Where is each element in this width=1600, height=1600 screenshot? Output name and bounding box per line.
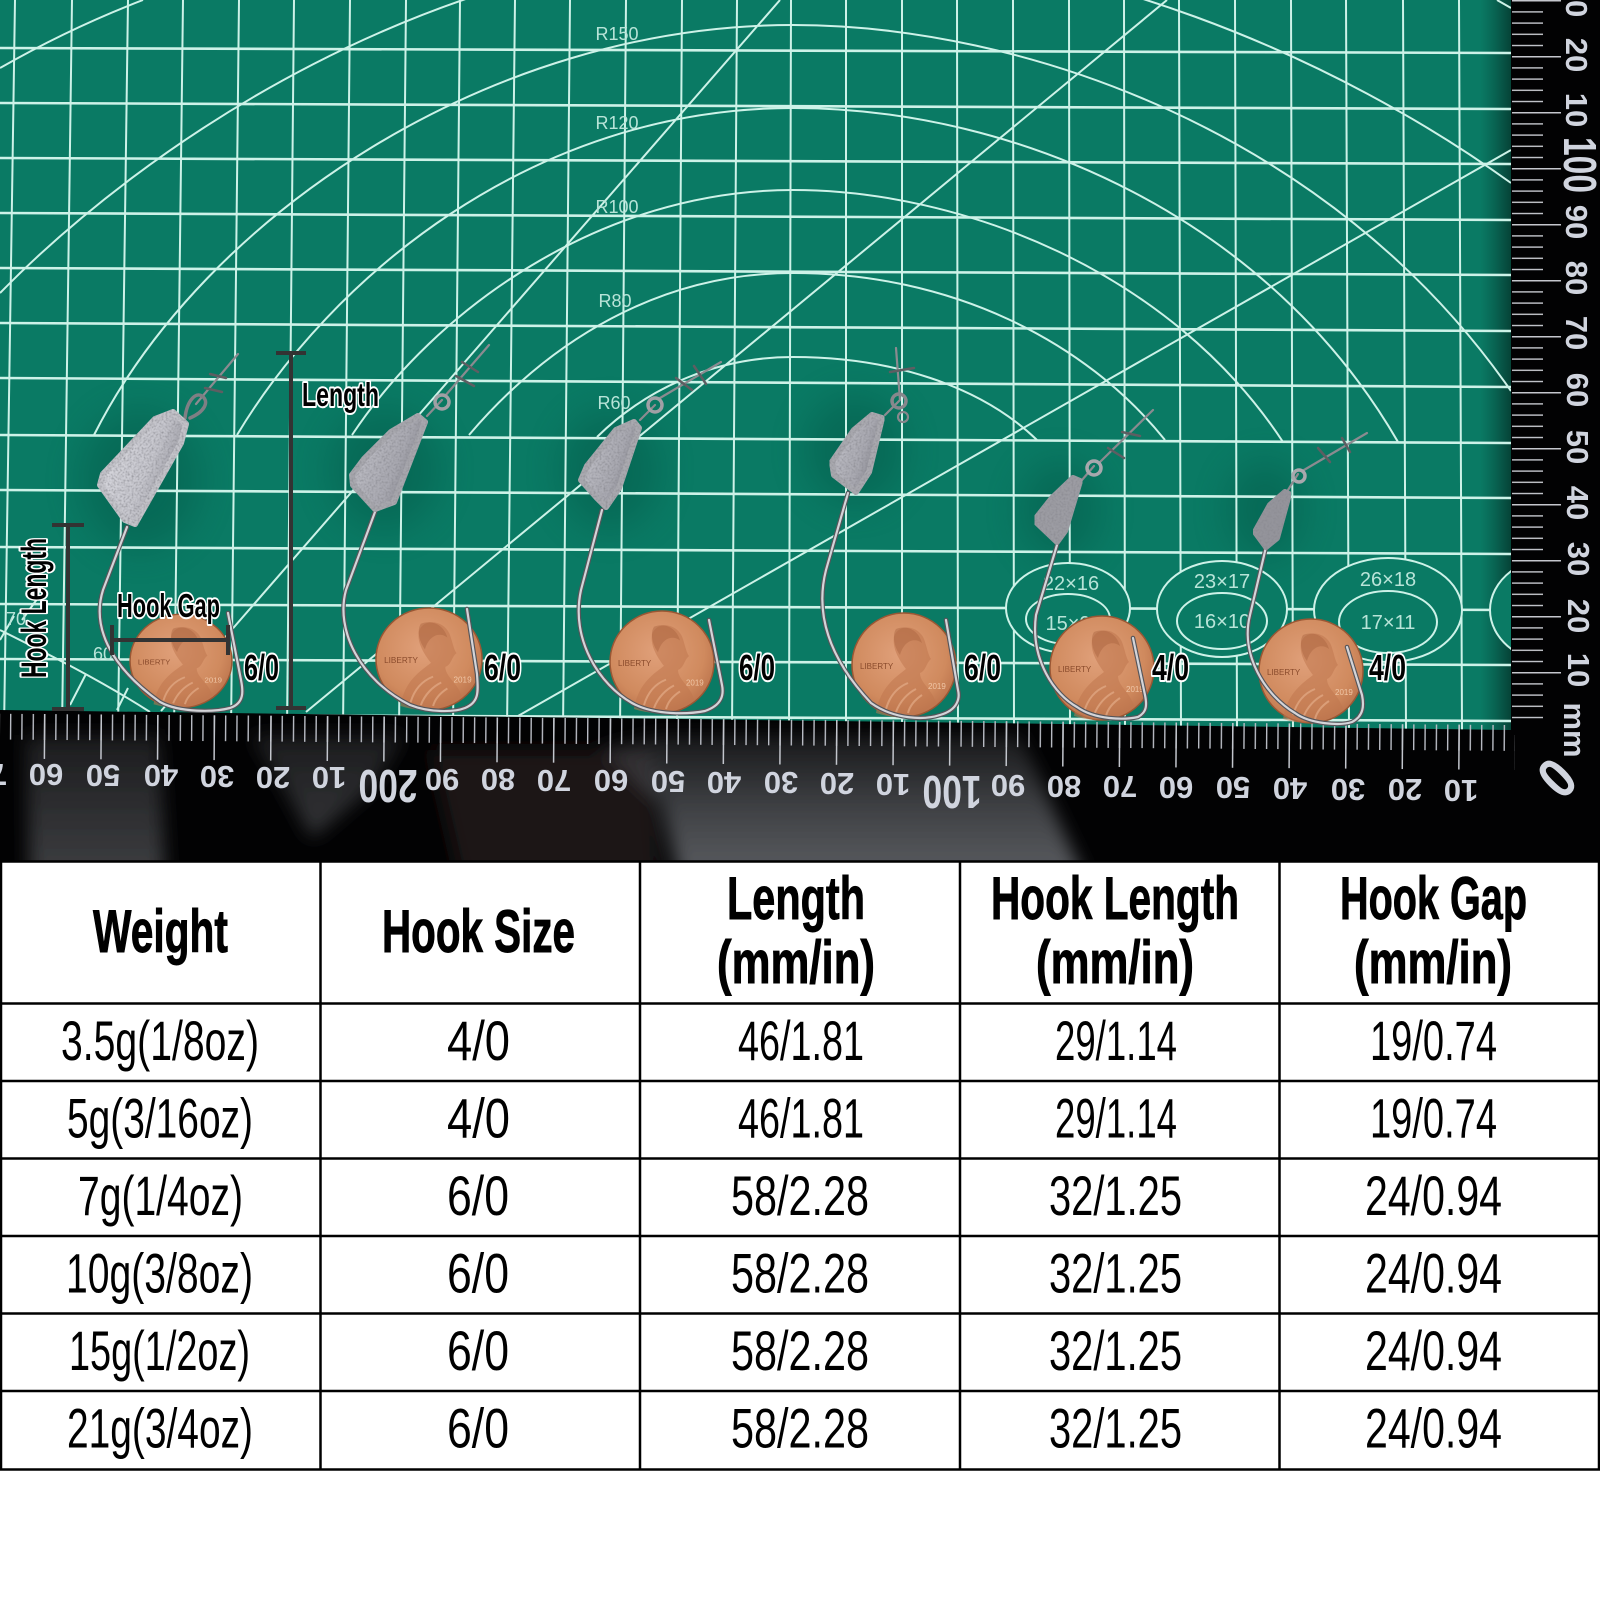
table header: Hook Length xyxy=(991,865,1239,932)
ruler numbers: 50 xyxy=(651,764,685,799)
right ruler numbers: 10 xyxy=(1559,93,1594,127)
right ruler ticks xyxy=(1512,0,1561,728)
bottom ruler xyxy=(0,714,1515,818)
ruler numbers: 10 xyxy=(312,760,346,795)
ruler numbers: 10 xyxy=(1444,773,1478,808)
row 5g: 4/0 xyxy=(447,1086,510,1150)
mat radius labels: R120 xyxy=(595,113,639,133)
label: length: Length xyxy=(302,376,379,413)
row 7g: 6/0 xyxy=(447,1164,509,1227)
label: hook gap: Hook Gap xyxy=(117,587,220,624)
ruler numbers: 30 xyxy=(764,765,798,800)
mat edge shadow xyxy=(1486,0,1511,730)
ruler reflections xyxy=(25,735,1085,880)
mat radius labels: R80 xyxy=(598,291,632,311)
ellipse size labels: 23×17 xyxy=(1194,571,1250,593)
row 3.5g: 4/0 xyxy=(447,1009,510,1072)
grid lines xyxy=(4,0,1462,730)
mat radius labels: R100 xyxy=(595,197,639,217)
hook shadows xyxy=(80,395,1303,560)
ruler numbers: 80 xyxy=(481,762,515,797)
mat radius labels: R60 xyxy=(597,393,631,413)
row 21g: 24/0.94 xyxy=(1365,1396,1502,1460)
ellipse size labels: 26×18 xyxy=(1360,569,1416,591)
coin 5 xyxy=(1050,616,1154,720)
ruler numbers: 100 xyxy=(922,766,982,818)
row 5g: 19/0.74 xyxy=(1370,1086,1497,1150)
right ruler numbers: 10 xyxy=(1561,653,1596,687)
table header: (mm/in) xyxy=(717,929,875,996)
ruler numbers: 70 xyxy=(1103,769,1137,804)
right ruler numbers: 30 xyxy=(1561,542,1596,576)
table header: Weight xyxy=(93,898,228,965)
coin 2 xyxy=(376,608,482,710)
ruler numbers: 50 xyxy=(1216,770,1250,805)
ellipse size labels: 16×10 xyxy=(1194,611,1250,633)
dimension: length xyxy=(276,353,306,708)
row 15g: 32/1.25 xyxy=(1049,1319,1182,1382)
row 15g: 6/0 xyxy=(447,1319,509,1382)
row 21g: 58/2.28 xyxy=(731,1396,869,1460)
ruler numbers: 40 xyxy=(144,758,178,793)
right ruler numbers: 40 xyxy=(1560,486,1595,520)
ellipse size labels xyxy=(1043,569,1416,635)
right ruler xyxy=(1511,0,1600,811)
size label 5: 4/0 xyxy=(1152,647,1189,688)
ruler numbers: 40 xyxy=(1273,771,1307,806)
size label 4: 6/0 xyxy=(964,647,1001,688)
size label 2: 6/0 xyxy=(484,647,521,688)
row 3.5g: 3.5g(1/8oz) xyxy=(61,1009,259,1072)
ruler numbers: 20 xyxy=(820,766,854,801)
ellipse size labels: 17×11 xyxy=(1361,612,1415,634)
ruler numbers: 30 xyxy=(200,759,234,794)
photo background xyxy=(0,0,1600,862)
row 21g: 6/0 xyxy=(447,1396,509,1460)
row 21g xyxy=(67,1396,1502,1460)
ruler numbers: 50 xyxy=(86,758,120,793)
ruler numbers: 90 xyxy=(991,768,1025,803)
size table xyxy=(0,861,1600,1470)
ruler numbers: 60 xyxy=(29,757,63,792)
row 7g: 58/2.28 xyxy=(731,1164,869,1227)
right ruler numbers: mm xyxy=(1557,702,1592,758)
right ruler numbers: 90 xyxy=(1559,205,1594,239)
row 5g: 29/1.14 xyxy=(1055,1086,1177,1150)
row 10g: 10g(3/8oz) xyxy=(66,1242,253,1304)
hook 3 xyxy=(579,362,723,713)
right ruler numbers: 80 xyxy=(1559,261,1594,295)
row 10g: 58/2.28 xyxy=(731,1242,869,1304)
row 5g xyxy=(67,1086,1497,1150)
row 15g: 24/0.94 xyxy=(1365,1319,1502,1382)
hook 5 xyxy=(1035,410,1153,719)
size label 1: 6/0 xyxy=(244,647,279,688)
row 7g: 32/1.25 xyxy=(1049,1164,1182,1227)
row 3.5g xyxy=(61,1009,1497,1072)
hook 1 xyxy=(100,354,242,711)
row 7g: 7g(1/4oz) xyxy=(78,1164,243,1227)
ruler numbers: 10 xyxy=(876,767,910,802)
ruler numbers: 20 xyxy=(1388,772,1422,807)
right ruler numbers: 20 xyxy=(1559,38,1594,72)
row 15g: 15g(1/2oz) xyxy=(69,1319,250,1382)
coin 6 xyxy=(1259,619,1363,723)
ruler numbers: 20 xyxy=(256,760,290,795)
dimension: hook length xyxy=(52,525,84,709)
table header: Hook Size xyxy=(382,898,575,965)
ruler numbers: 30 xyxy=(1331,772,1365,807)
ruler numbers: 40 xyxy=(707,765,741,800)
cutting mat xyxy=(0,0,1600,730)
row 7g: 24/0.94 xyxy=(1365,1164,1502,1227)
row 10g: 24/0.94 xyxy=(1365,1242,1502,1304)
mat radius labels: 70 xyxy=(6,609,26,629)
table header: Length xyxy=(727,865,865,932)
size label 3: 6/0 xyxy=(739,647,775,688)
right ruler numbers: 70 xyxy=(1559,316,1594,350)
row 3.5g: 46/1.81 xyxy=(738,1009,864,1072)
coin 4 xyxy=(852,613,956,717)
hook 4 xyxy=(822,348,959,718)
ruler numbers: 70 xyxy=(537,763,571,798)
hook 6 xyxy=(1248,433,1367,724)
ruler numbers: 60 xyxy=(594,763,628,798)
coin 1 xyxy=(130,614,232,708)
size label 6: 4/0 xyxy=(1369,647,1406,688)
right ruler numbers: 50 xyxy=(1560,430,1595,464)
right ruler numbers xyxy=(1525,0,1600,811)
ruler numbers: 60 xyxy=(1159,770,1193,805)
ruler ticks xyxy=(0,714,1515,770)
dimension: hook gap xyxy=(112,625,228,655)
row 15g: 58/2.28 xyxy=(731,1319,869,1382)
row 3.5g: 29/1.14 xyxy=(1055,1009,1177,1072)
right ruler numbers: 60 xyxy=(1560,373,1595,407)
row 15g xyxy=(69,1319,1502,1382)
mat radius labels: R150 xyxy=(595,24,639,44)
ruler numbers: 80 xyxy=(1047,769,1081,804)
table header xyxy=(93,865,1527,996)
right ruler numbers: 0 xyxy=(1525,746,1590,811)
row 5g: 5g(3/16oz) xyxy=(67,1086,253,1150)
row 21g: 32/1.25 xyxy=(1049,1396,1182,1460)
ruler numbers: 90 xyxy=(425,762,459,797)
row 10g: 32/1.25 xyxy=(1049,1242,1182,1304)
table header: (mm/in) xyxy=(1036,929,1194,996)
row 5g: 46/1.81 xyxy=(738,1086,864,1150)
row 3.5g: 19/0.74 xyxy=(1370,1009,1497,1072)
ellipse size labels: 15×9 xyxy=(1045,613,1091,635)
hook 2 xyxy=(343,345,489,711)
mat radius labels: 60 xyxy=(93,644,113,664)
mat radius labels xyxy=(6,24,639,664)
row 10g: 6/0 xyxy=(447,1242,509,1304)
ruler numbers xyxy=(0,757,1478,818)
ellipse size labels: 22×16 xyxy=(1043,573,1099,595)
radius arcs and angle lines xyxy=(0,0,1511,716)
table header: (mm/in) xyxy=(1354,929,1512,996)
ruler numbers: 200 xyxy=(358,760,418,812)
row 10g xyxy=(66,1242,1502,1304)
row 21g: 21g(3/4oz) xyxy=(67,1396,253,1460)
right ruler numbers: 20 xyxy=(1561,599,1596,633)
printed ellipses xyxy=(1005,557,1511,663)
label: hook length: Hook Length xyxy=(15,538,54,678)
row 7g xyxy=(78,1164,1502,1227)
coin 3 xyxy=(610,611,714,713)
